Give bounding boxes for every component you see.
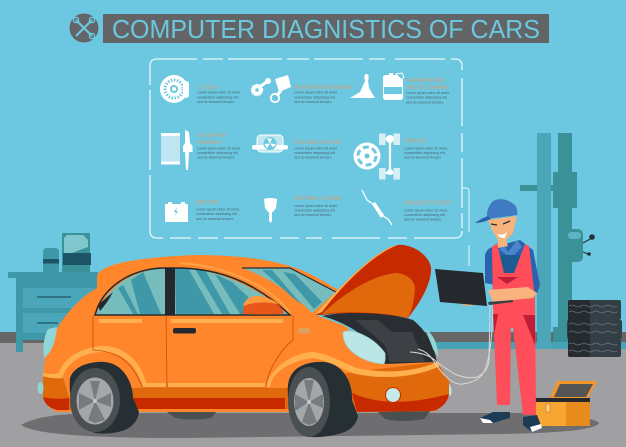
- info item: transmission and oil: [383, 73, 450, 104]
- info item: transmission and oil: sed do eiusmod tempor.: [406, 100, 444, 104]
- info item: battery: consectetur adipiscing elit,: [196, 212, 238, 216]
- laptop: [435, 269, 487, 306]
- info item: filter and candles: consectetur adipiscing elit,: [197, 151, 239, 155]
- bib: [497, 255, 520, 276]
- info item: chassis: CHASSIS: [404, 138, 427, 144]
- info item: cooling system: sed do eiusmod tempor.: [294, 156, 332, 160]
- info item: transmission and oil: TRANSMISSION: [406, 78, 445, 84]
- info item: engine pistons: [252, 75, 352, 104]
- door details: [93, 316, 293, 387]
- hand: [460, 303, 472, 306]
- rear reflector: [38, 382, 44, 394]
- info item: filter and candles: Lorem ipsum dolor sit amet,: [197, 147, 241, 151]
- info item: transmission and oil: consectetur adipiscing elit,: [406, 96, 448, 100]
- head: [488, 216, 517, 248]
- fog light: [385, 387, 401, 403]
- ground shadow: [21, 413, 599, 438]
- info item: central locking: CENTRAL LOCKING: [294, 196, 342, 202]
- rear wheel: [70, 362, 139, 434]
- diagnostic cables: [410, 305, 493, 384]
- info item: battery: sed do eiusmod tempor.: [196, 217, 234, 221]
- info item: exhaust system: [362, 190, 450, 225]
- info item: chassis: [354, 134, 448, 180]
- info item: chassis: consectetur adipiscing elit,: [404, 151, 446, 155]
- workbench with oil cans: [8, 233, 98, 352]
- info item: gear shift: [350, 74, 375, 98]
- info item: central locking: sed do eiusmod tempor.: [294, 213, 332, 217]
- front wheel: [288, 362, 358, 437]
- lower body band: [43, 362, 450, 412]
- info item: filter and candles: [161, 130, 241, 170]
- car body: [43, 255, 450, 412]
- hood: [315, 245, 431, 318]
- cream body stripes: [43, 346, 440, 387]
- info item: engine pistons: consectetur adipiscing elit,: [294, 96, 336, 100]
- info item: battery: BATTERY: [196, 200, 220, 206]
- toolbox: [535, 381, 597, 426]
- info item: filter and candles: CANDLES: [197, 140, 222, 146]
- collar: [500, 240, 522, 258]
- info item: cooling system: COOLING SYSTEM: [294, 140, 340, 146]
- windshield: [242, 268, 336, 313]
- info item: battery: [165, 200, 240, 222]
- icon: crossed wrenches: [70, 14, 98, 42]
- info item: central locking: Lorem ipsum dolor sit amet,: [294, 204, 338, 208]
- info item: central locking: [264, 196, 342, 223]
- car lift: [520, 133, 595, 349]
- info item: clutch: [160, 75, 241, 104]
- info item: transmission and oil: AND OIL CHANGE: [406, 85, 450, 91]
- info item: exhaust system: sed do eiusmod tempor.: [404, 218, 442, 222]
- info item: cooling system: Lorem ipsum dolor sit amet,: [294, 147, 338, 151]
- rear light: [44, 327, 57, 358]
- info item: filter and candles: sed do eiusmod tempor.: [197, 156, 235, 160]
- title banner: COMPUTER DIAGNISTICS OF CARS: [112, 14, 540, 44]
- info item: engine pistons: Lorem ipsum dolor sit amet,: [294, 91, 338, 95]
- engine bay: [322, 313, 437, 364]
- info item: exhaust system: Lorem ipsum dolor sit amet,: [404, 208, 448, 212]
- info item: central locking: consectetur adipiscing elit,: [294, 208, 336, 212]
- info item: exhaust system: consectetur adipiscing elit,: [404, 213, 446, 217]
- baseboard: [0, 332, 626, 349]
- info item: chassis: sed do eiusmod tempor.: [404, 156, 442, 160]
- roof accent: [180, 263, 290, 313]
- floor: [0, 343, 626, 447]
- red sill and bumpers: [43, 393, 449, 412]
- info item: clutch: consectetur adipiscing elit,: [197, 96, 239, 100]
- info item: cooling system: consectetur adipiscing elit,: [294, 151, 336, 155]
- dashed panel frame: [150, 59, 469, 266]
- info item: exhaust system: EXHAUST SYSTEM: [404, 200, 450, 206]
- info item: battery: Lorem ipsum dolor sit amet,: [196, 208, 240, 212]
- stack of tires: [567, 300, 622, 357]
- overalls: [492, 243, 536, 415]
- info item: engine pistons: sed do eiusmod tempor.: [294, 100, 332, 104]
- far-side wheels: [163, 409, 432, 421]
- car windows: [96, 268, 289, 315]
- shirt: [485, 240, 540, 293]
- info item: clutch: sed do eiusmod tempor.: [197, 100, 235, 104]
- info item: chassis: Lorem ipsum dolor sit amet,: [404, 147, 448, 151]
- info item: clutch: Lorem ipsum dolor sit amet,: [197, 91, 241, 95]
- car: [38, 245, 452, 412]
- info item: filter and candles: FILTER AND: [197, 133, 226, 139]
- side mirror: [243, 296, 284, 314]
- mechanic: [435, 199, 542, 432]
- info item: clutch: CLUTCH: [197, 85, 218, 91]
- headlight: [343, 331, 385, 364]
- info item: cooling system: [252, 135, 340, 160]
- info item: transmission and oil: Lorem ipsum dolor sit amet,: [406, 91, 450, 95]
- cap: [487, 199, 517, 219]
- info item: engine pistons: ROTATION MECHANISM: [294, 85, 352, 91]
- side marker: [298, 328, 310, 334]
- shoes: [480, 412, 510, 423]
- front lower light: [449, 383, 452, 396]
- forearm: [488, 287, 537, 302]
